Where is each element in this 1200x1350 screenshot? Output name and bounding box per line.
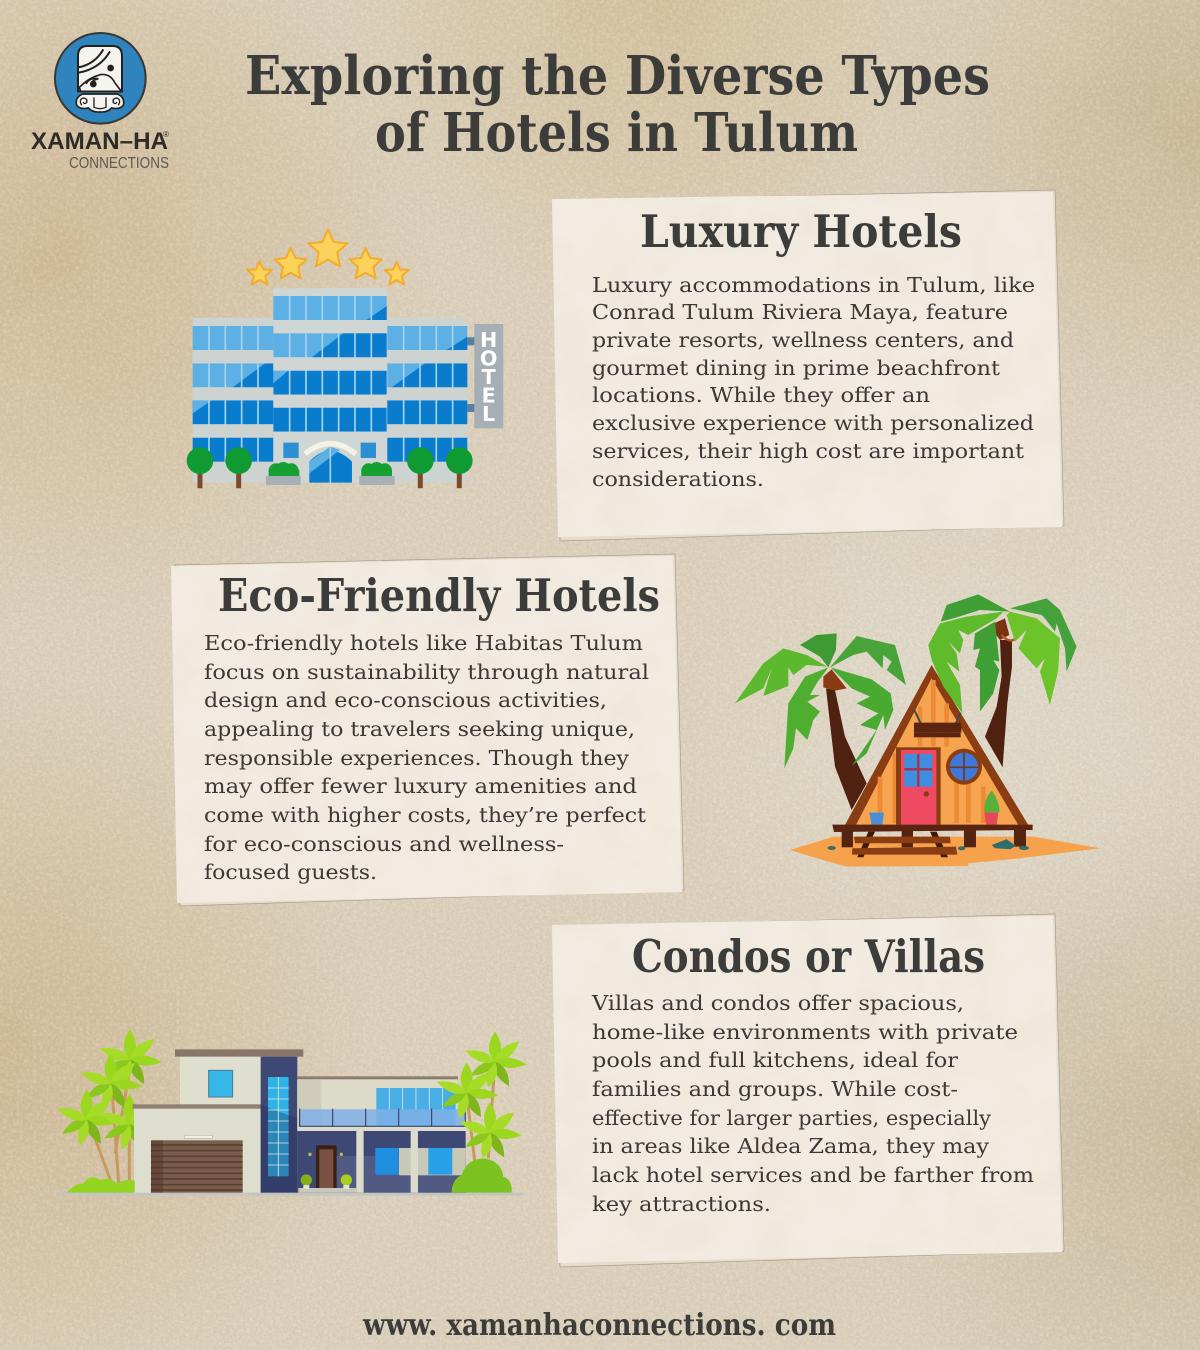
text: eco-friendly hotels description: for eco-conscious and wellness- <box>204 832 564 856</box>
icon: five stars <box>247 229 409 285</box>
logo subtitle: CONNECTIONS <box>69 155 169 172</box>
text: luxury hotels description: locations. While they offer an <box>592 383 930 407</box>
hut door <box>896 747 941 825</box>
text: eco-friendly hotels description: focused guests. <box>204 860 377 884</box>
hut frame and wall <box>845 665 1028 825</box>
deck and stairs <box>832 825 1033 857</box>
title: of Hotels in Tulum <box>375 102 858 164</box>
text: condos or villas description: in areas like Aldea Zama, they may <box>592 1134 989 1158</box>
text: luxury hotels description: private resorts, wellness centers, and <box>592 328 1014 352</box>
hedges and planters <box>266 462 395 485</box>
text: eco-friendly hotels description: responsible experiences. Though they <box>204 746 629 770</box>
text: luxury hotels description: considerations. <box>592 467 764 491</box>
panel: condos or villas <box>552 914 1064 1267</box>
palm trunks <box>826 640 1012 810</box>
right palms <box>435 1032 527 1163</box>
text: luxury hotels description: gourmet dining in prime beachfront <box>592 356 1001 380</box>
text: luxury hotels description <box>592 273 1035 491</box>
trees <box>187 447 473 488</box>
logo emblem <box>55 33 146 124</box>
left palm fronds <box>735 633 906 768</box>
hotel sign <box>467 324 503 428</box>
text: condos or villas description: key attractions. <box>592 1192 771 1216</box>
upper right storey <box>297 1076 466 1131</box>
heading: luxury hotels: Luxury Hotels <box>640 205 962 258</box>
footer website: www. xamanhaconnections. com <box>362 1308 836 1343</box>
illustration: luxury hotel with five stars <box>187 229 503 488</box>
text: eco-friendly hotels description <box>204 631 649 884</box>
blue pot <box>869 813 884 825</box>
shrubs <box>67 1158 512 1193</box>
text: condos or villas description: pools and full kitchens, ideal for <box>592 1048 958 1072</box>
hotel sign: E <box>482 384 496 408</box>
text: eco-friendly hotels description: Eco-friendly hotels like Habitas Tulum <box>204 631 643 655</box>
panel: eco-friendly hotels <box>171 554 684 906</box>
ground line <box>58 1193 523 1196</box>
text: eco-friendly hotels description: appealing to travelers seeking unique, <box>204 717 635 741</box>
hotel sign: L <box>482 402 495 426</box>
logo registered mark: ® <box>163 130 169 139</box>
garage block <box>133 1049 303 1193</box>
sand <box>790 837 1100 867</box>
hotel building <box>193 288 467 483</box>
text: luxury hotels description: Conrad Tulum Riviera Maya, feature <box>592 300 1008 324</box>
hut round window <box>946 749 982 785</box>
beach rocks <box>828 839 1029 850</box>
title <box>245 45 990 164</box>
title: Exploring the Diverse Types <box>245 45 990 107</box>
logo wordmark: XAMAN–HA <box>31 128 168 155</box>
hotel sign: T <box>482 365 496 389</box>
heading: condos or villas: Condos or Villas <box>632 930 985 983</box>
text: luxury hotels description: Luxury accommodations in Tulum, like <box>592 273 1035 297</box>
hotel entrance <box>305 444 356 483</box>
hotel sign: H <box>480 328 497 352</box>
text: condos or villas description <box>591 991 1034 1216</box>
illustration: a-frame beach hut with palm trees <box>735 594 1100 867</box>
hut sign <box>914 709 961 737</box>
panel: luxury hotels <box>552 190 1064 541</box>
text: eco-friendly hotels description: come with higher costs, they’re perfect <box>204 803 647 827</box>
text: eco-friendly hotels description: design and eco-conscious activities, <box>204 688 607 712</box>
ground floor right <box>297 1131 466 1193</box>
right palm fronds <box>928 594 1077 713</box>
text: luxury hotels description: services, their high cost are important <box>592 439 1025 463</box>
blue tower <box>261 1057 297 1193</box>
text: condos or villas description: lack hotel services and be farther from <box>592 1163 1034 1187</box>
heading: eco-friendly hotels: Eco-Friendly Hotels <box>218 569 660 622</box>
logo: Xaman-Ha Connections <box>31 33 169 172</box>
text: condos or villas description: home-like environments with private <box>592 1020 1018 1044</box>
text: condos or villas description: Villas and condos offer spacious, <box>591 991 964 1015</box>
text: eco-friendly hotels description: focus on sustainability through natural <box>204 660 649 684</box>
hotel sign: O <box>480 346 497 370</box>
text: luxury hotels description: exclusive experience with personalized <box>592 411 1034 435</box>
text: condos or villas description: families and groups. While cost- <box>592 1077 958 1101</box>
left palms <box>55 1029 162 1193</box>
text: eco-friendly hotels description: may offer fewer luxury amenities and <box>204 774 637 798</box>
text: condos or villas description: effective for larger parties, especially <box>592 1106 991 1130</box>
potted plant <box>984 791 999 825</box>
illustration: modern villa with palms <box>55 1029 527 1196</box>
